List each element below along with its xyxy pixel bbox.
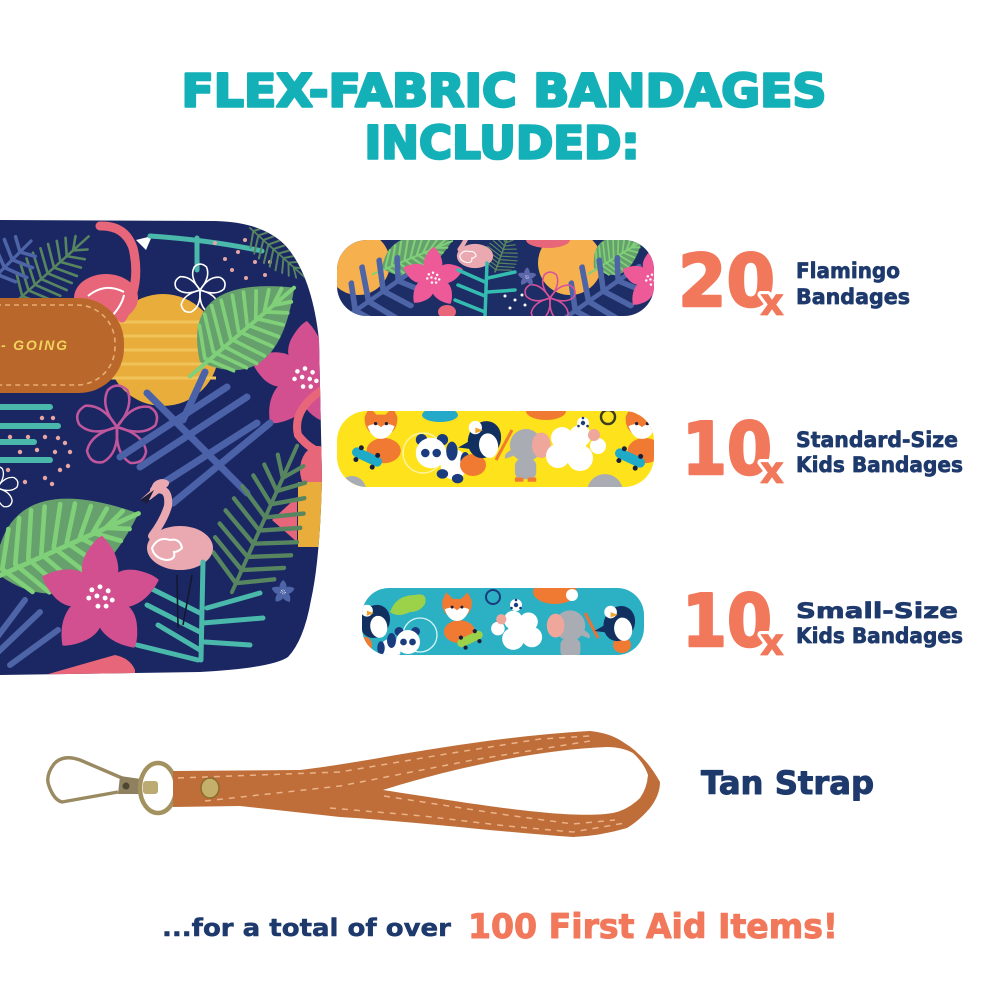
- icon: pink outline flower: [74, 386, 160, 468]
- tan brand patch: - GOING: [1, 337, 69, 353]
- label: small-size kids bandages: Kids Bandages: [796, 624, 963, 648]
- icon: small violet flower: [272, 580, 294, 602]
- label: small-size kids bandages: [796, 599, 963, 648]
- footer: total count: ...for a total of over: [162, 914, 451, 942]
- icon: metal clasp: [48, 758, 176, 813]
- label: tan strap: Tan Strap: [701, 764, 874, 802]
- icon: top right palm: [249, 227, 306, 279]
- icon: black flamingo legs: [177, 575, 192, 628]
- leather band: [173, 731, 660, 837]
- icon: left teal fronds with dots: [0, 407, 72, 486]
- bandage: yellow kids pattern: [337, 411, 654, 487]
- inner loop gap: [383, 747, 648, 815]
- icon: right flamingo: [272, 386, 322, 547]
- label: small-size kids bandages: Small-Size: [796, 599, 958, 623]
- icon: dark green palm: [212, 444, 308, 594]
- icon: upper green leaf: [188, 286, 296, 378]
- icon: top-left blue and green fronds: [0, 234, 90, 298]
- label: standard-size kids bandages: Kids Bandages: [796, 453, 963, 477]
- icon: teal fern: [137, 562, 263, 660]
- quantity: 20 flamingo: 20: [678, 239, 775, 323]
- icon: small white flower left: [0, 466, 20, 509]
- icon: sun: [105, 294, 220, 406]
- strap: tan leather wrist strap with clasp: [48, 731, 660, 837]
- pouch: tropical flamingo pattern: [0, 220, 322, 675]
- bandage: flamingo pattern: [337, 240, 654, 316]
- label: flamingo bandages: Bandages: [796, 285, 910, 309]
- quantity: 10 standard: x: [760, 449, 784, 492]
- footer: total count: [162, 907, 838, 947]
- tan brand patch: [0, 298, 124, 393]
- bandage: teal kids pattern: [362, 588, 644, 655]
- icon: right magenta flower: [254, 321, 321, 424]
- title: FLEX-FABRIC BANDAGES: [182, 64, 826, 118]
- title: [182, 64, 826, 170]
- label: standard-size kids bandages: [796, 428, 963, 477]
- icon: top salmon flamingo: [74, 226, 152, 322]
- icon: lower green leaf: [0, 498, 141, 595]
- icon: pink flamingo: [140, 479, 213, 570]
- footer: total count: 100 First Aid Items!: [468, 907, 838, 947]
- icon: rivet: [201, 778, 219, 798]
- quantity: 10 small: x: [760, 621, 784, 664]
- icon: large pink flower: [42, 536, 159, 648]
- quantity: 10 small: 10: [682, 579, 772, 663]
- quantity: 10 small: x: [760, 621, 784, 664]
- icon: blue fern: [120, 372, 270, 503]
- label: flamingo bandages: Flamingo: [796, 259, 900, 283]
- label: flamingo bandages: [796, 259, 910, 309]
- icon: teal top fronds: [150, 236, 272, 280]
- icon: bottom flamingo: [47, 655, 135, 674]
- quantity: 20 flamingo: x: [760, 281, 784, 324]
- icon: lower left blue fronds: [0, 600, 58, 665]
- label: standard-size kids bandages: Standard-Size: [796, 428, 958, 452]
- quantity: 10 standard: x: [760, 449, 784, 492]
- quantity: 20 flamingo: x: [760, 281, 784, 324]
- quantity: 10 standard: 10: [682, 407, 772, 491]
- stitching: [178, 736, 625, 832]
- title: INCLUDED:: [364, 116, 640, 170]
- icon: white outline flower: [173, 264, 227, 316]
